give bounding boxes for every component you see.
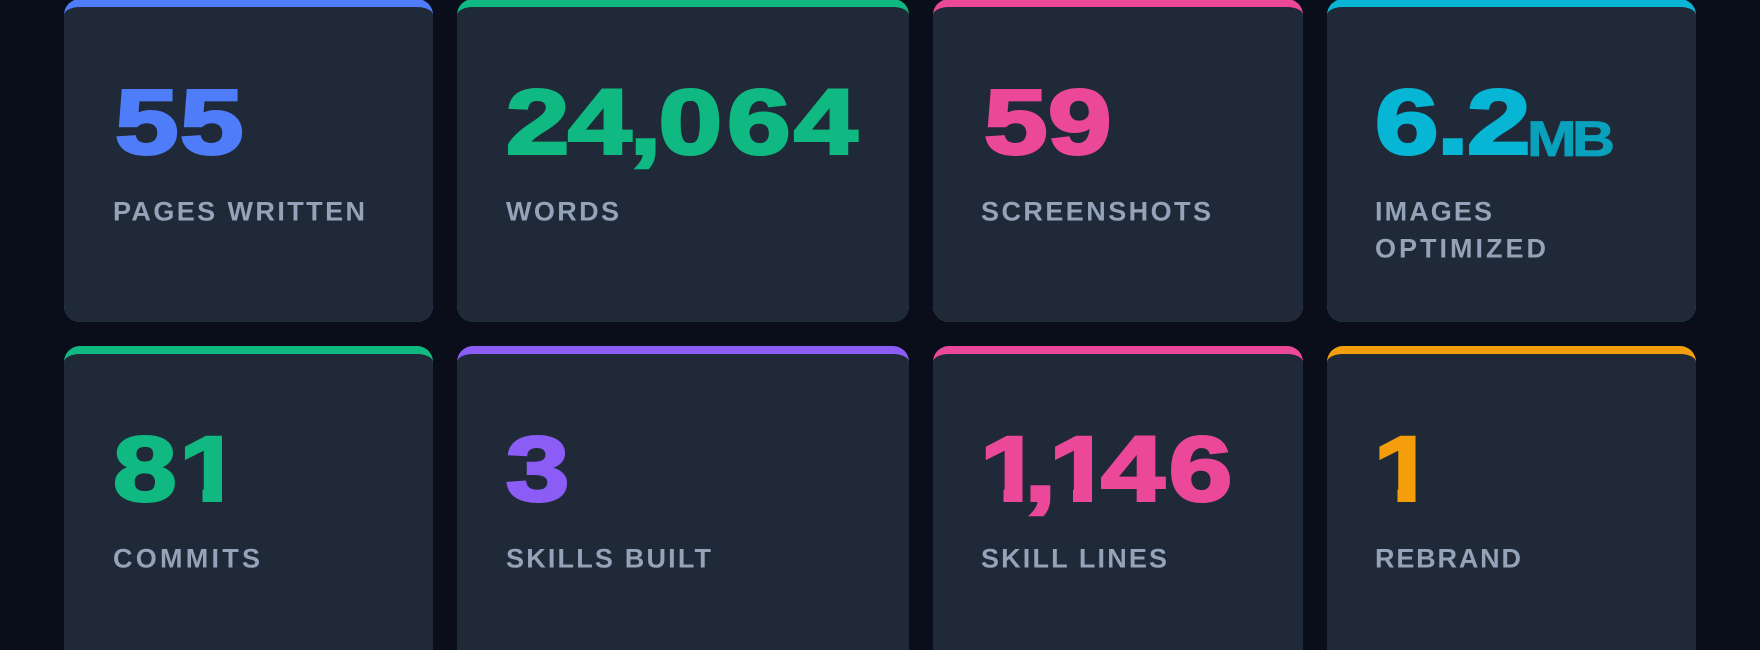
label: skill lines: SKILL LINES: [981, 544, 1167, 574]
value: 59: 59: [984, 70, 1111, 173]
value: 1,146: ,: [1024, 417, 1056, 520]
card: rebrand: [1327, 346, 1696, 650]
card: screenshots: [933, 0, 1303, 322]
label: optimized: OPTIMIZED: [1375, 234, 1546, 264]
value: 6.2 MB: MB: [1527, 111, 1615, 167]
card: pages written: [64, 0, 433, 322]
value: 55: 55: [115, 70, 243, 173]
card: skills built: [457, 346, 909, 650]
label: skills built: SKILLS BUILT: [506, 544, 712, 574]
value: 1: 1: [1374, 417, 1437, 520]
value: 1,146: [980, 417, 1232, 520]
card: words: [457, 0, 909, 322]
value: 6.2 MB: [1375, 70, 1615, 173]
label: images: IMAGES: [1375, 196, 1492, 226]
label: pages written: PAGES WRITTEN: [113, 196, 365, 226]
value: 24,064: 24,064: [506, 70, 858, 173]
value: 81: 81: [113, 417, 242, 520]
label: screenshots: SCREENSHOTS: [981, 196, 1211, 226]
value: 1,146: 46: [1101, 417, 1232, 520]
value: 1,146: 1: [980, 417, 1043, 520]
value: 1,146: 1: [1049, 417, 1113, 520]
value: 3: 3: [506, 417, 569, 520]
label: words: WORDS: [506, 196, 619, 226]
label: commits: COMMITS: [113, 544, 260, 574]
card: commits: [64, 346, 433, 650]
value: 6.2 MB: 6.2: [1375, 70, 1530, 173]
label: rebrand: REBRAND: [1375, 544, 1521, 574]
card: skill lines: [933, 346, 1303, 650]
card: images optimized: [1327, 0, 1696, 322]
